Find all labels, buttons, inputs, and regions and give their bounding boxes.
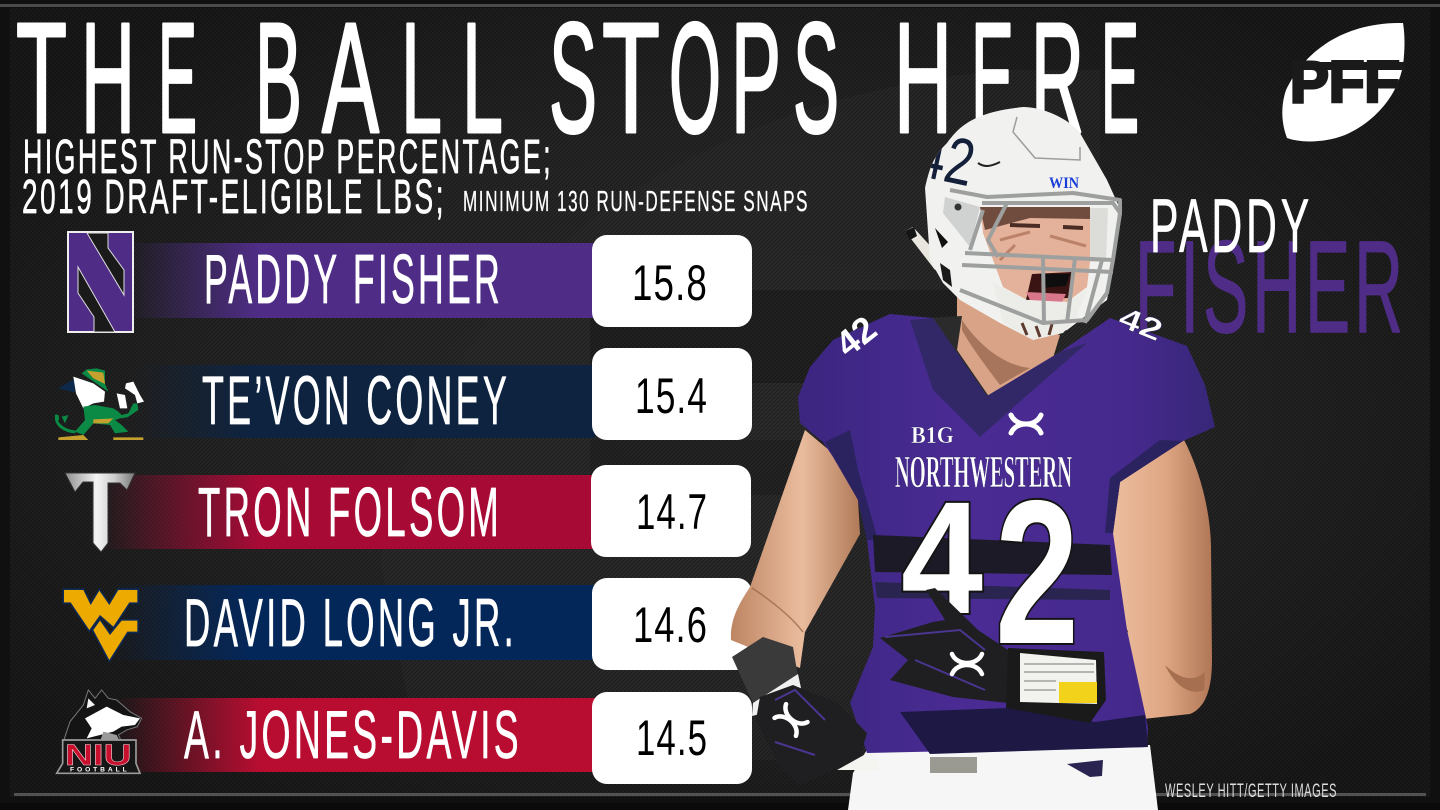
face [980, 207, 1090, 302]
logo: Notre Dame leprechaun [55, 368, 144, 440]
jersey number [901, 458, 1079, 687]
jersey stripes [873, 535, 1112, 575]
chest patch: B1G [911, 423, 954, 449]
left arm [731, 430, 860, 668]
logo: Troy T [65, 473, 135, 552]
wrist card band [1006, 648, 1106, 723]
bar 3 [100, 475, 595, 549]
helmet crown panel [1013, 117, 1080, 160]
value box 2 [592, 348, 752, 440]
row 1: Paddy Fisher [68, 232, 752, 332]
value box 1: 15.8 [632, 255, 708, 311]
player photo cut-out [731, 107, 1215, 810]
helmet WIN decal: WIN [1049, 175, 1079, 192]
value box 4: 14.6 [633, 597, 708, 653]
subtitle: MINIMUM 130 RUN-DEFENSE SNAPS [463, 186, 809, 218]
PFF logo [1282, 23, 1405, 141]
pants [848, 745, 1158, 810]
chest logo [1011, 415, 1041, 433]
bar 5 [115, 698, 595, 772]
right glove [880, 588, 1008, 703]
jersey V panel [910, 318, 1087, 437]
name 4: DAVID LONG JR. [184, 585, 517, 661]
helmet pad [1088, 208, 1108, 262]
row 4: David Long Jr. [64, 578, 752, 670]
shoulder numbers: 42 [827, 308, 884, 365]
PFF logo: PFF [1290, 50, 1400, 115]
row 5: A. Jones-Davis [57, 690, 752, 784]
right arm [1095, 438, 1212, 724]
logo: NIU husky [57, 690, 142, 774]
left wrist tape [732, 637, 801, 716]
logo: West Virginia WV [64, 590, 137, 660]
name 3: TRON FOLSOM [198, 473, 502, 551]
jersey lower shadow [900, 708, 1148, 754]
value box 3 [591, 465, 751, 557]
logo: Northwestern N [68, 232, 133, 332]
player name: Paddy: PADDY [1150, 184, 1313, 269]
side gear [943, 197, 980, 247]
value box 2: 15.4 [635, 368, 708, 424]
jersey side panels [825, 430, 1183, 540]
row 2: Te'Von Coney [55, 348, 752, 440]
value box 5: 14.5 [636, 710, 708, 766]
left glove [756, 685, 867, 785]
name 1: PADDY FISHER [204, 240, 503, 318]
bar 1 [125, 243, 595, 318]
mouth [1026, 272, 1072, 300]
value box 1 [592, 235, 752, 327]
jersey number: 4 [901, 468, 983, 647]
helmet number: 42 [911, 116, 981, 200]
neck [957, 295, 1060, 398]
undershirt collar [930, 316, 990, 398]
logo: NIU husky: FOOTBALL [70, 767, 127, 774]
shoulder numbers [827, 301, 1167, 365]
chin strap [993, 283, 1087, 340]
jersey [798, 314, 1215, 753]
bar 2 [135, 365, 595, 438]
subtitle: HIGHEST RUN-STOP PERCENTAGE; [23, 131, 553, 184]
helmet [905, 107, 1122, 340]
name 2: TE’VON CONEY [202, 362, 510, 439]
subtitle: 2019 DRAFT-ELIGIBLE LBS; [22, 171, 446, 224]
logo: NIU husky: NIU [65, 739, 132, 772]
jersey number: 2 [995, 458, 1079, 687]
value box 4 [592, 578, 752, 670]
value box 5 [592, 692, 752, 784]
facemask [950, 190, 1120, 323]
title [16, 0, 1139, 166]
row 3: Tron Folsom [65, 465, 751, 557]
value box 3: 14.7 [636, 484, 708, 540]
helmet strap [905, 227, 945, 270]
subtitle [22, 131, 809, 224]
name 5: A. JONES-DAVIS [184, 697, 522, 773]
bar 4 [110, 585, 595, 660]
player photo cut-out: NORTHWESTERN [895, 446, 1072, 497]
shoulder numbers: 42 [1114, 301, 1167, 348]
